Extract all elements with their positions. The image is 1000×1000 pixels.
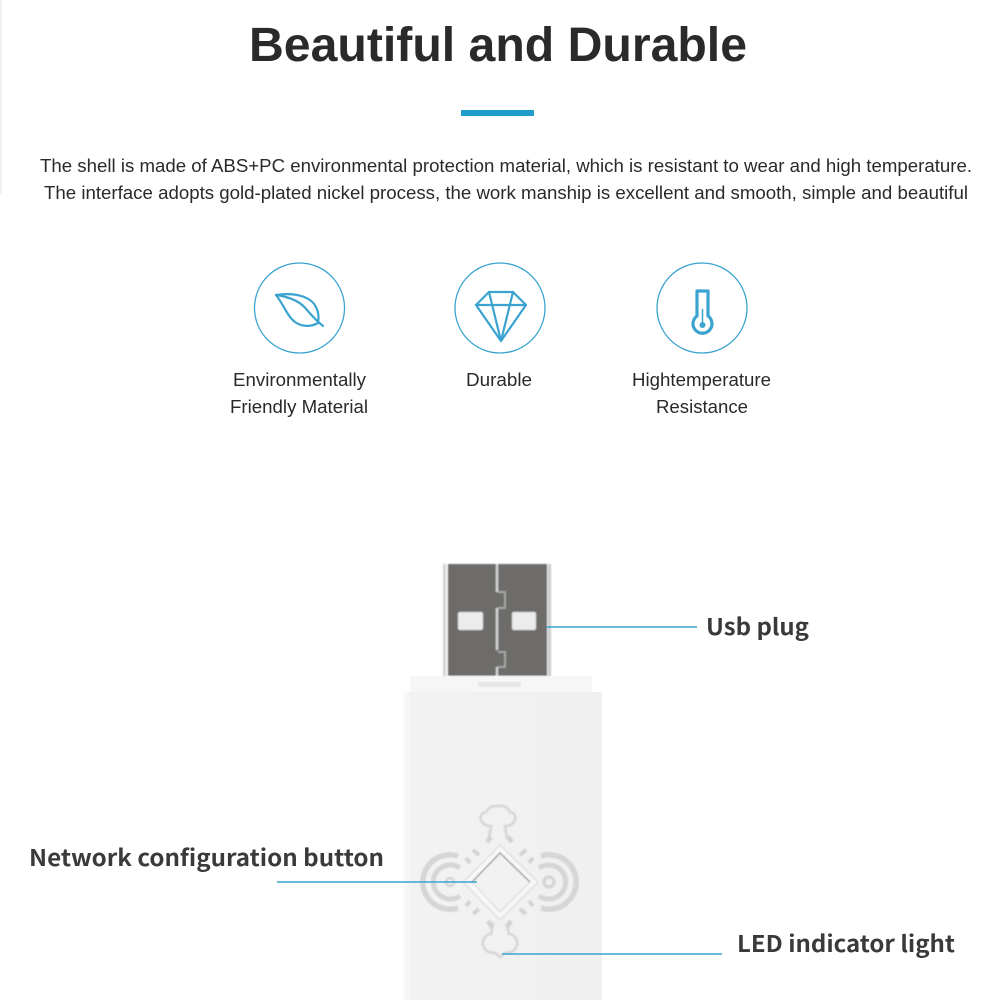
- description text: The interface adopts gold-plated nickel process, the work manship is excellent and smooth, simple and beautiful: [44, 183, 968, 203]
- label: Friendly Material: [230, 397, 368, 417]
- top knob: [481, 806, 515, 838]
- callout: network configuration button: Network configuration button: [29, 839, 384, 873]
- device body: [403, 676, 602, 1000]
- label: Durable: [466, 370, 532, 390]
- callout: led indicator light: LED indicator light: [737, 925, 955, 959]
- feature: high temperature resistance: [632, 263, 771, 417]
- usb dongle product: [403, 564, 602, 1000]
- button shaded edge: [472, 853, 530, 882]
- diamond frame: [463, 845, 538, 920]
- label: Resistance: [656, 397, 748, 417]
- description text: The shell is made of ABS+PC environmental protection material, which is resistant to wear and high temperature.: [40, 156, 972, 176]
- configuration button emblem: [423, 806, 576, 957]
- feature: durable: [455, 263, 545, 390]
- feature: environmentally friendly material: [230, 263, 368, 417]
- small diamond side marks: [466, 850, 533, 914]
- title: Beautiful and Durable: [249, 19, 747, 72]
- button: [472, 853, 530, 912]
- label: [230, 370, 368, 417]
- label: [632, 370, 771, 417]
- icon: thermometer: [657, 263, 747, 353]
- callout: usb plug: Usb plug: [706, 608, 809, 642]
- right rings: [539, 855, 576, 909]
- usb plug metal: [443, 564, 551, 677]
- label: Hightemperature: [632, 370, 771, 390]
- icon: diamond: [455, 263, 545, 353]
- icon: leaf: [254, 263, 344, 353]
- left rings: [423, 855, 460, 909]
- description text: [40, 156, 972, 203]
- bottom knob: [483, 924, 517, 957]
- title accent bar: [461, 110, 534, 116]
- bottom knob side marks: [488, 921, 511, 927]
- label: Environmentally: [233, 370, 366, 390]
- top knob side marks: [487, 837, 512, 842]
